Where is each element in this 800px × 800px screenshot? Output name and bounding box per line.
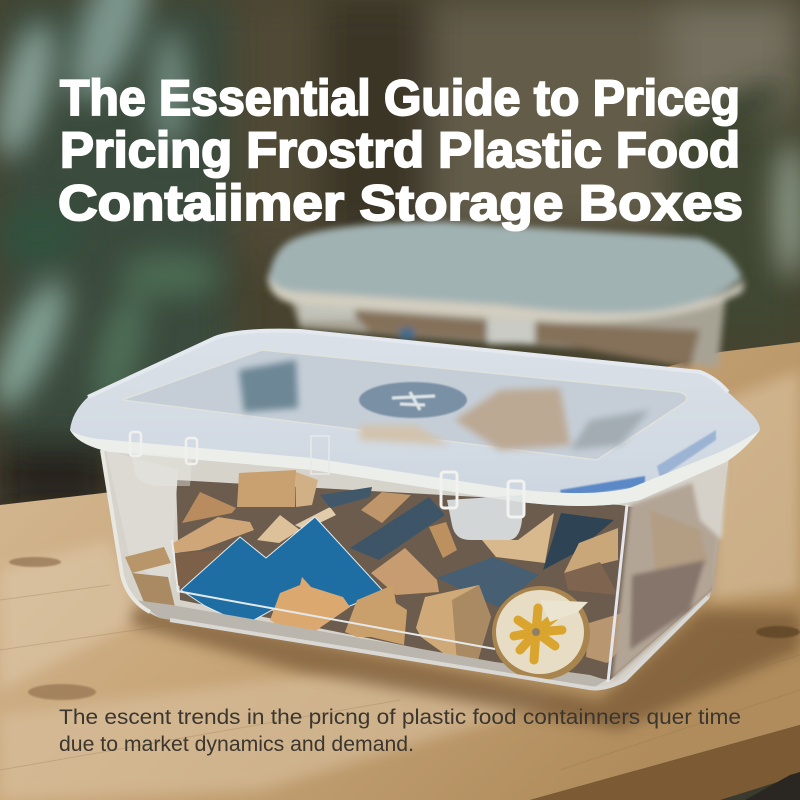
front container bbox=[70, 331, 760, 690]
subtitle: due to market dynamics and demand. bbox=[59, 733, 414, 756]
container lower floor bbox=[135, 600, 606, 690]
right side blurred pieces bbox=[612, 462, 727, 680]
blurred background foliage bbox=[0, 0, 800, 520]
lid middle ridge bbox=[311, 436, 329, 474]
back container clips bbox=[300, 290, 355, 320]
lid clip right bbox=[441, 472, 524, 540]
back container bbox=[268, 222, 745, 368]
lid blue bands bbox=[560, 476, 645, 498]
container front corner edge bbox=[608, 505, 627, 682]
table shadow under container bbox=[130, 605, 800, 730]
back container contents bbox=[350, 310, 700, 368]
title: The Essential Guide to Priceg bbox=[60, 70, 740, 126]
container contents bbox=[106, 450, 727, 680]
container body bbox=[100, 445, 730, 690]
subtitle: The escent trends in the pricng of plastic food containners quer time bbox=[59, 706, 741, 729]
chart baseline bbox=[177, 591, 495, 649]
title: Contaiimer Storage Boxes bbox=[58, 175, 743, 231]
title: Pricing Frostrd Plastic Food bbox=[60, 122, 740, 178]
wooden table bbox=[0, 342, 800, 800]
subtitle bbox=[59, 706, 741, 756]
container lid bbox=[70, 331, 760, 506]
back container lid bbox=[268, 222, 742, 314]
lid clip left bbox=[130, 432, 197, 486]
dark ribbed block upper bbox=[350, 497, 445, 560]
dried lemon slice bbox=[492, 586, 590, 680]
table front edge bbox=[530, 725, 800, 800]
lid inner panel bbox=[122, 350, 687, 460]
tan blob bbox=[270, 577, 350, 635]
dark ribbed block lower bbox=[437, 557, 539, 607]
back container body bbox=[288, 290, 725, 368]
blue mountain chart bbox=[181, 517, 384, 625]
dried slices bbox=[345, 585, 407, 645]
title bbox=[58, 70, 743, 231]
lid logo bbox=[359, 382, 467, 418]
lid rim bbox=[70, 430, 760, 506]
